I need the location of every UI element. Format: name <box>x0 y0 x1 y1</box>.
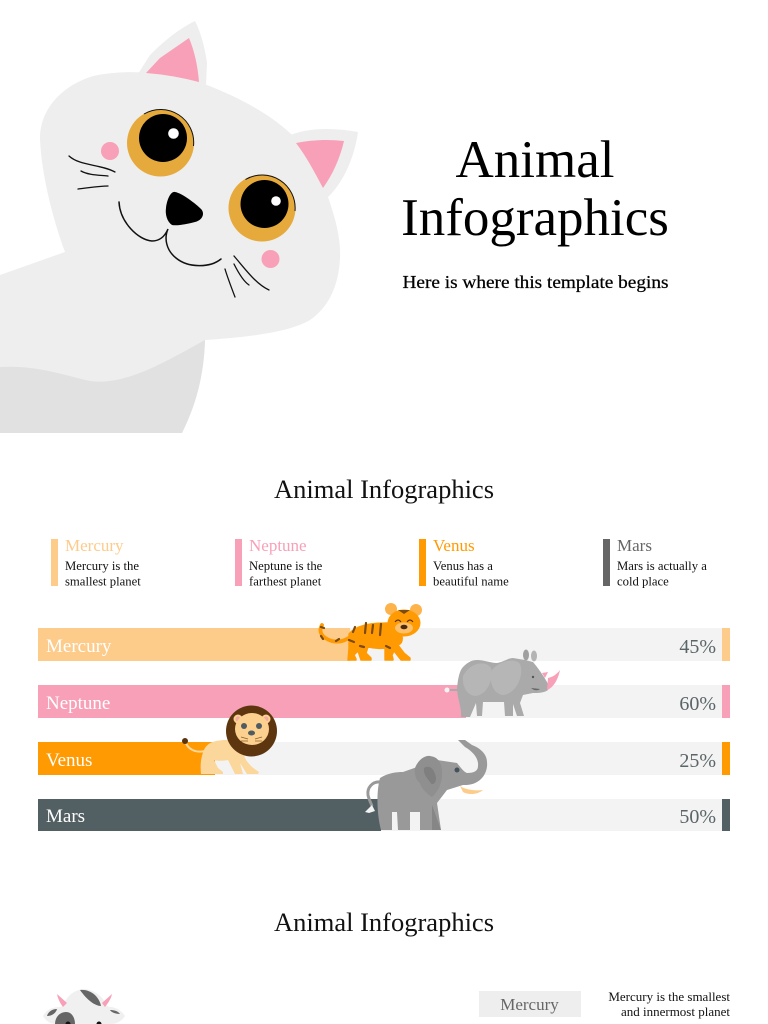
legend: Mars: cold place <box>617 574 669 588</box>
legend: Mercury: Mercury <box>65 536 124 555</box>
bar: Mars 50% <box>38 799 730 831</box>
heading: bar section: Animal Infographics <box>274 474 494 504</box>
title: Animal <box>456 131 614 189</box>
cat whiskers <box>69 156 269 297</box>
legend: Mercury <box>51 536 141 588</box>
bar: Mercury 45% <box>38 628 730 661</box>
legend: Venus: Venus has a <box>433 559 493 573</box>
text: Mercury description: and innermost planet <box>621 1004 730 1019</box>
bar: Mercury 45%: 45% <box>679 636 716 658</box>
legend: Neptune: Neptune <box>249 536 307 555</box>
title second line: Infographics <box>401 189 669 247</box>
bar: Venus 25% <box>38 742 730 775</box>
icon: elephant <box>365 740 487 830</box>
cat nose <box>166 192 203 225</box>
bar: Venus 25%: Venus <box>46 750 92 771</box>
cat body shadow <box>0 340 205 433</box>
legend: Mercury: smallest planet <box>65 574 141 588</box>
label box: Mercury <box>479 991 581 1017</box>
cat right ear <box>288 129 358 198</box>
cat cheeks <box>101 142 280 268</box>
illustration: white cat <box>0 21 358 433</box>
legend: Neptune: farthest planet <box>249 574 322 588</box>
bar: Neptune 60% <box>38 685 730 718</box>
legend: Mars: Mars <box>617 536 652 555</box>
legend: Venus <box>419 536 509 588</box>
legend: Mercury: Mercury is the <box>65 559 139 573</box>
cat left ear <box>138 21 207 86</box>
bar: Venus 25%: 25% <box>679 750 716 772</box>
bar: Neptune 60%: Neptune <box>46 693 110 714</box>
icon: lion <box>182 706 277 774</box>
legend: Venus: Venus <box>433 536 475 555</box>
subtitle: Here is where this template begins <box>402 272 668 292</box>
legend: Mars <box>603 536 707 588</box>
legend: Mars: Mars is actually a <box>617 559 707 573</box>
legend: Neptune <box>235 536 323 588</box>
text: Mercury description <box>608 989 730 1019</box>
icon: cow <box>43 989 125 1024</box>
legend: Neptune: Neptune is the <box>249 559 323 573</box>
legend: Venus: beautiful name <box>433 574 509 588</box>
text: Mercury description: Mercury is the smallest <box>608 989 730 1004</box>
cat body <box>0 72 340 433</box>
cat mouth <box>119 202 221 266</box>
bar: Mars 50%: 50% <box>679 806 716 828</box>
icon: rhino <box>444 650 560 717</box>
bar: Mercury 45%: Mercury <box>46 636 112 657</box>
cat left eye <box>127 109 194 176</box>
bar: Neptune 60%: 60% <box>679 693 716 715</box>
cat right eye <box>228 174 296 242</box>
bar: Mars 50%: Mars <box>46 806 85 827</box>
icon: tiger <box>320 603 422 660</box>
label box: Mercury: Mercury <box>500 995 559 1014</box>
heading: lower section: Animal Infographics <box>274 907 494 937</box>
